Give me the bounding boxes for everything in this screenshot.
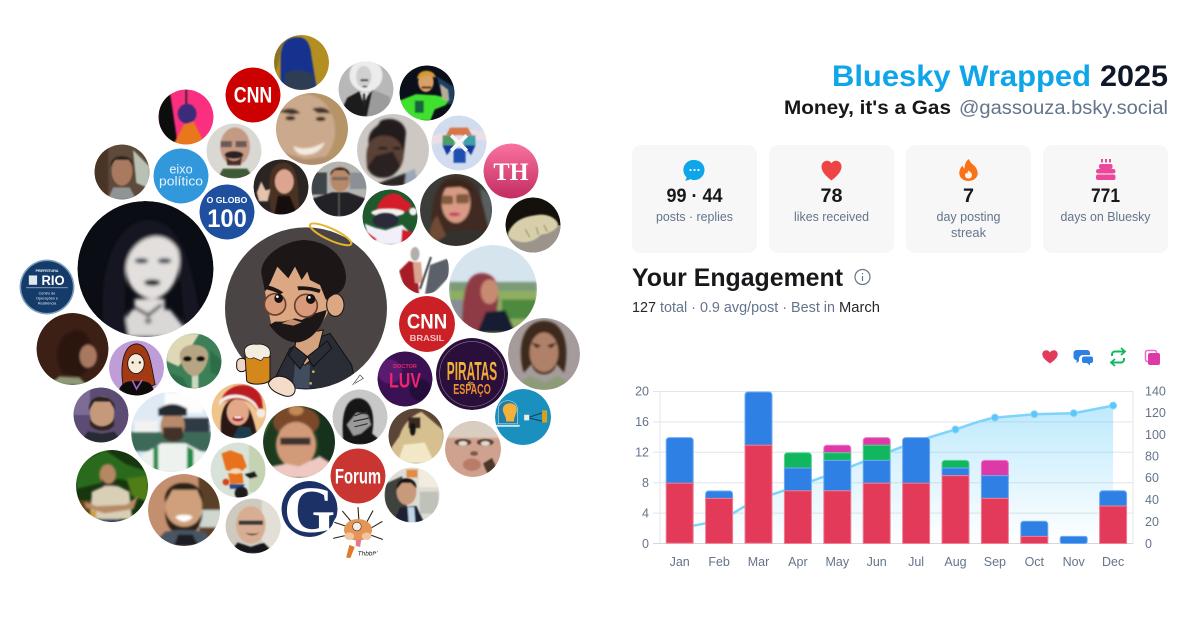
avatar: Prefeitura Rio logo: PREFEITURA: [35, 269, 59, 273]
icon: legend likes heart: [1042, 350, 1058, 364]
subtitle: display name and handle: [784, 98, 1168, 119]
avatar: Bill the Cat cartoon: [331, 506, 385, 560]
bar: May: [824, 445, 851, 544]
avatar: Piratas do Espaco logo: [436, 338, 508, 410]
stat card: days on Bluesky: days on Bluesky: [1060, 210, 1151, 224]
avatar: cat in Santa hat: [362, 190, 418, 244]
avatar: Prefeitura Rio logo: Resiliência: [38, 302, 57, 306]
engagement summary line: March: [839, 300, 880, 316]
left y-axis labels: 4: [642, 506, 649, 520]
avatar: man with long hair: [508, 318, 580, 390]
avatar: CNN logo: [226, 68, 280, 122]
avatar: Doctor Luv logo: [378, 352, 432, 406]
bar: Oct: [1021, 521, 1048, 544]
avatar: Piratas do Espaco logo: PIRATAS: [447, 358, 497, 386]
left y-axis labels: 8: [642, 476, 649, 490]
stat card: day posting streak: day posting: [936, 210, 1001, 224]
avatar: skull: [506, 198, 560, 252]
avatar: main cartoon user with beer and halo: [225, 220, 387, 396]
avatar: Forum logo: [330, 448, 386, 504]
x-axis month labels: [670, 555, 1124, 569]
avatar: Prefeitura Rio logo: [20, 260, 74, 314]
bar: Jun: [863, 438, 890, 544]
x-axis month labels: Jul: [908, 555, 924, 569]
avatar: woman with glasses: [420, 174, 492, 246]
chart legend icons: [1042, 348, 1160, 366]
avatar: CNN logo: CNN: [234, 83, 272, 108]
stat card: likes received: likes received: [794, 210, 869, 224]
stat card: days on Bluesky: [1043, 145, 1168, 253]
icon: info: [855, 270, 870, 284]
stat card: likes received: 78: [820, 186, 842, 207]
avatar: man with glasses and moustache: [206, 124, 262, 178]
avatar: TH logo: TH: [493, 158, 529, 186]
avatar: curly hair woman outdoors: [449, 245, 537, 335]
avatar: smiling man with beard: [148, 474, 221, 546]
avatar: Forum logo: Forum: [335, 466, 381, 489]
avatar: smiling young man close-up: [275, 93, 348, 166]
right y-axis labels: 120: [1145, 406, 1166, 420]
avatar: pink anime figure: [158, 90, 214, 144]
right y-axis labels: 60: [1145, 471, 1159, 485]
engagement summary line: 127: [632, 300, 656, 316]
icon: cake: [1096, 159, 1116, 180]
avatar: eixo politico: eixo: [169, 162, 193, 176]
icon: legend quotes squares: [1146, 350, 1160, 365]
right y-axis labels: 20: [1145, 515, 1159, 529]
avatar: CNN Brasil logo: CNN: [407, 309, 447, 333]
avatar: Bill the Cat cartoon: Thbbft!: [358, 551, 378, 558]
avatar: Prefeitura Rio logo: RIO: [41, 273, 65, 288]
avatar: CNN Brasil logo: [399, 296, 455, 352]
bar: Mar: [745, 392, 772, 543]
avatar: lightbulb in birdcage: [495, 389, 551, 445]
avatar: man in black jacket: [312, 162, 366, 216]
avatar: O Globo 100: O GLOBO: [207, 196, 248, 205]
avatar: woman in Santa hat laughing: [212, 384, 266, 438]
subtitle: display name and handle: @gassouza.bsky.social: [959, 98, 1168, 119]
right y-axis labels: 0: [1145, 537, 1152, 551]
stat card: likes received: [769, 145, 894, 253]
bar: Apr: [784, 453, 811, 544]
x-axis month labels: Nov: [1063, 555, 1086, 569]
avatar: TH logo: [484, 144, 538, 198]
avatar: veiled woman: [388, 408, 444, 464]
avatar: Doctor Luv logo: DOCTOR: [393, 364, 417, 370]
cumulative area: [680, 406, 1113, 544]
avatar: The Guardian G logo: G: [284, 474, 335, 547]
stat card: posts and replies: 99 · 44: [666, 186, 723, 207]
left y-axis labels: 20: [635, 384, 649, 398]
left y-axis labels: [635, 384, 649, 551]
avatar: O Globo 100: [200, 184, 254, 240]
avatar: O Globo 100: 100: [207, 205, 247, 233]
stat card: day posting streak: 7: [963, 186, 974, 207]
x-axis month labels: Apr: [788, 555, 808, 569]
bar: Feb: [706, 491, 733, 543]
bar: Jan: [666, 438, 693, 543]
right y-axis labels: 140: [1145, 384, 1166, 398]
avatar: cosplay figure: [399, 244, 449, 294]
avatar: goth woman portrait: [78, 201, 214, 337]
x-axis month labels: Jun: [867, 555, 887, 569]
left y-axis labels: 16: [635, 415, 649, 429]
avatar: illustrated freckled face: [445, 421, 501, 477]
avatar: eixo politico: [154, 148, 208, 204]
avatar: Prefeitura Rio logo: Operações e: [36, 297, 58, 301]
cumulative line: [680, 406, 1113, 528]
title: 2025: [1100, 60, 1168, 93]
avatar: Prefeitura Rio logo: Centro de: [39, 292, 55, 296]
avatar: outdoors man with beer: [76, 450, 148, 523]
avatar: brown vintage woman: [36, 313, 108, 385]
avatar: Crash Bandicoot plush: [210, 442, 266, 500]
avatar: blue figure on gold: [274, 35, 329, 90]
stat card: days on Bluesky: 771: [1091, 186, 1120, 207]
avatar: smiling bearded man: [74, 388, 128, 442]
avatar: Doctor Luv logo: LUV: [389, 369, 421, 392]
title: Bluesky Wrapped: [832, 60, 1091, 93]
right y-axis labels: 100: [1145, 428, 1166, 442]
stat card: posts and replies: posts · replies: [656, 210, 733, 224]
right y-axis labels: 40: [1145, 493, 1159, 507]
stat card: day posting streak: streak: [951, 226, 987, 240]
avatar: rainbow ghost logo: [432, 116, 486, 170]
icon: heart: [822, 161, 842, 180]
stat card: day posting streak: [906, 145, 1031, 253]
right y-axis labels: 80: [1145, 450, 1159, 464]
x-axis month labels: Sep: [984, 555, 1006, 569]
x-axis month labels: Feb: [708, 555, 730, 569]
bar: Jul: [903, 438, 930, 544]
x-axis month labels: May: [825, 555, 850, 569]
avatar: eixo politico: político: [159, 174, 203, 188]
avatar: alien mask in Palmeiras shirt: [166, 334, 222, 388]
heading: your engagement: Your Engagement: [632, 264, 844, 292]
bar: Sep: [981, 460, 1008, 544]
x-axis month labels: Jan: [670, 555, 690, 569]
icon: flame: [959, 159, 978, 181]
bar: Aug: [942, 460, 969, 544]
avatar: CNN Brasil logo: BRASIL: [410, 333, 444, 343]
x-axis month labels: Oct: [1025, 555, 1045, 569]
avatar: woman waving: [254, 160, 308, 214]
left y-axis labels: 0: [642, 537, 649, 551]
avatar: black and white man in suit: [338, 59, 394, 116]
bar: Dec: [1100, 491, 1127, 544]
stat card: posts and replies: [632, 145, 757, 253]
avatar: lilac cartoon woman: [109, 340, 164, 396]
x-axis month labels: Mar: [748, 555, 769, 569]
avatar: bald smiling man with glasses: [226, 498, 280, 554]
engagement summary line: total · 0.9 avg/post · Best in: [660, 300, 835, 316]
avatar: green shirt streamer: [400, 66, 454, 120]
cumulative points: [952, 402, 1117, 433]
right y-axis labels: [1145, 384, 1166, 551]
avatar: man with afro: [357, 114, 429, 186]
engagement chart: [635, 384, 1166, 569]
avatar: man in green-white football shirt: [131, 392, 211, 472]
stacked bars: [666, 392, 1127, 544]
left y-axis labels: 12: [635, 446, 649, 460]
x-axis month labels: Aug: [944, 555, 967, 569]
avatar: hooded figure hand on face: [332, 390, 388, 444]
avatar: Piratas do Espaco logo: ESPAÇO: [453, 381, 491, 398]
bar: Nov: [1060, 536, 1087, 544]
avatar: Piratas do Espaco logo: do: [467, 381, 474, 387]
avatar: sunglasses woman: [263, 405, 335, 478]
avatar: man in car: [94, 144, 150, 200]
icon: speech bubble: [683, 160, 705, 181]
icon: legend reposts arrows: [1111, 348, 1125, 366]
avatar: man in suit selfie: [384, 468, 440, 522]
subtitle: display name and handle: Money, it's a Gas: [784, 98, 951, 119]
icon: legend replies bubbles: [1074, 350, 1093, 366]
x-axis month labels: Dec: [1102, 555, 1124, 569]
chart grid: [653, 391, 1133, 544]
avatar bubble cluster: [20, 35, 580, 560]
